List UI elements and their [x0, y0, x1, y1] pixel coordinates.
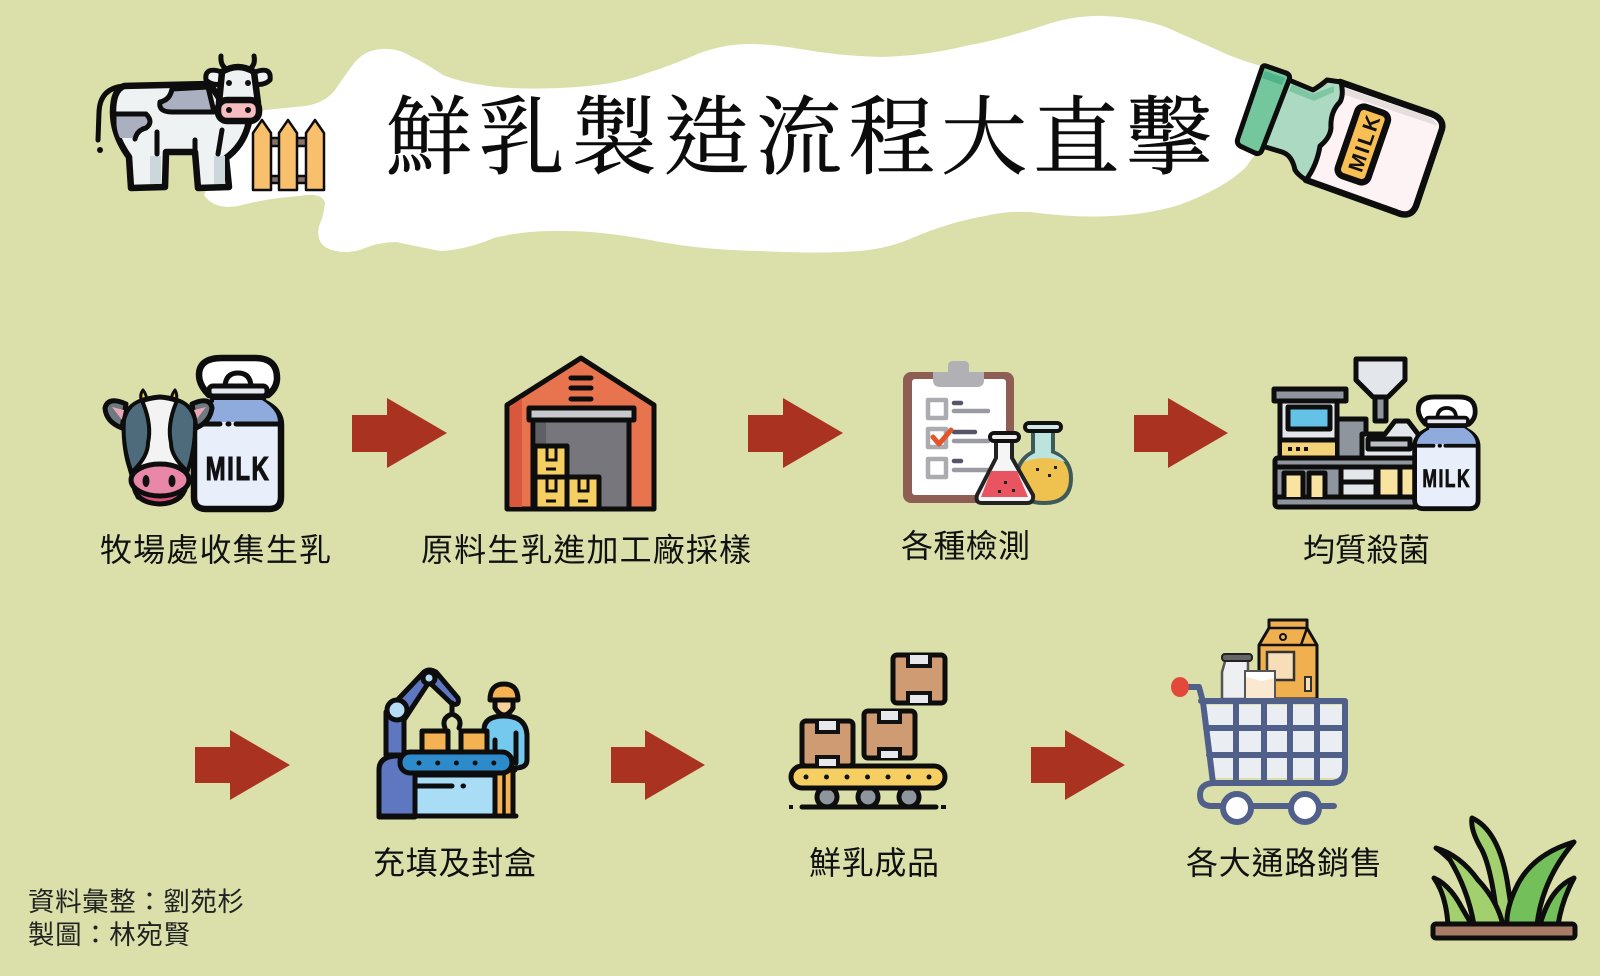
step 7 label: 各大通路銷售 — [1186, 845, 1382, 881]
step 7: shopping cart icon — [1171, 620, 1345, 822]
step 4: small milk jug icon: MILK — [1422, 465, 1471, 493]
step 1: cow and milk jug icon: MILK — [206, 451, 270, 488]
step 4: homogenising machine icon — [1274, 359, 1418, 507]
step 1 label: 牧場處收集生乳 — [100, 532, 331, 568]
step 1: cow and milk jug icon — [105, 358, 281, 509]
milk splash banner — [204, 16, 1290, 253]
arrow 1 — [352, 398, 447, 468]
step 5 label: 充填及封盒 — [373, 845, 536, 881]
arrow 4 — [195, 730, 290, 800]
icon: tilted milk bottle — [1237, 66, 1442, 214]
arrow 5 — [611, 730, 705, 800]
step 3: checklist and flasks icon — [903, 361, 1071, 503]
icon: grass — [1433, 818, 1575, 938]
step 3 label: 各種檢測 — [901, 528, 1030, 564]
icon: fence — [253, 120, 324, 190]
credit: graphic design: 製圖：林宛賢 — [28, 920, 190, 950]
step 6: boxes on conveyor icon — [789, 655, 946, 807]
step 2 label: 原料生乳進加工廠採樣 — [421, 532, 751, 568]
arrow 3 — [1134, 398, 1228, 468]
credits — [28, 887, 244, 950]
arrow 6 — [1031, 730, 1125, 800]
step 6 label: 鮮乳成品 — [809, 845, 939, 881]
icon: cow — [97, 56, 270, 188]
credit: data compilation: 資料彙整：劉苑杉 — [28, 887, 244, 917]
step 2: warehouse icon — [507, 358, 654, 509]
arrow 2 — [748, 398, 843, 468]
step 4: small milk jug icon — [1415, 397, 1478, 509]
title: 鮮乳製造流程大直擊 — [386, 90, 1212, 186]
step 4 label: 均質殺菌 — [1303, 532, 1430, 568]
icon: tilted milk bottle: MILK — [1345, 113, 1385, 175]
step 5: robot arm filling line icon — [379, 670, 527, 817]
